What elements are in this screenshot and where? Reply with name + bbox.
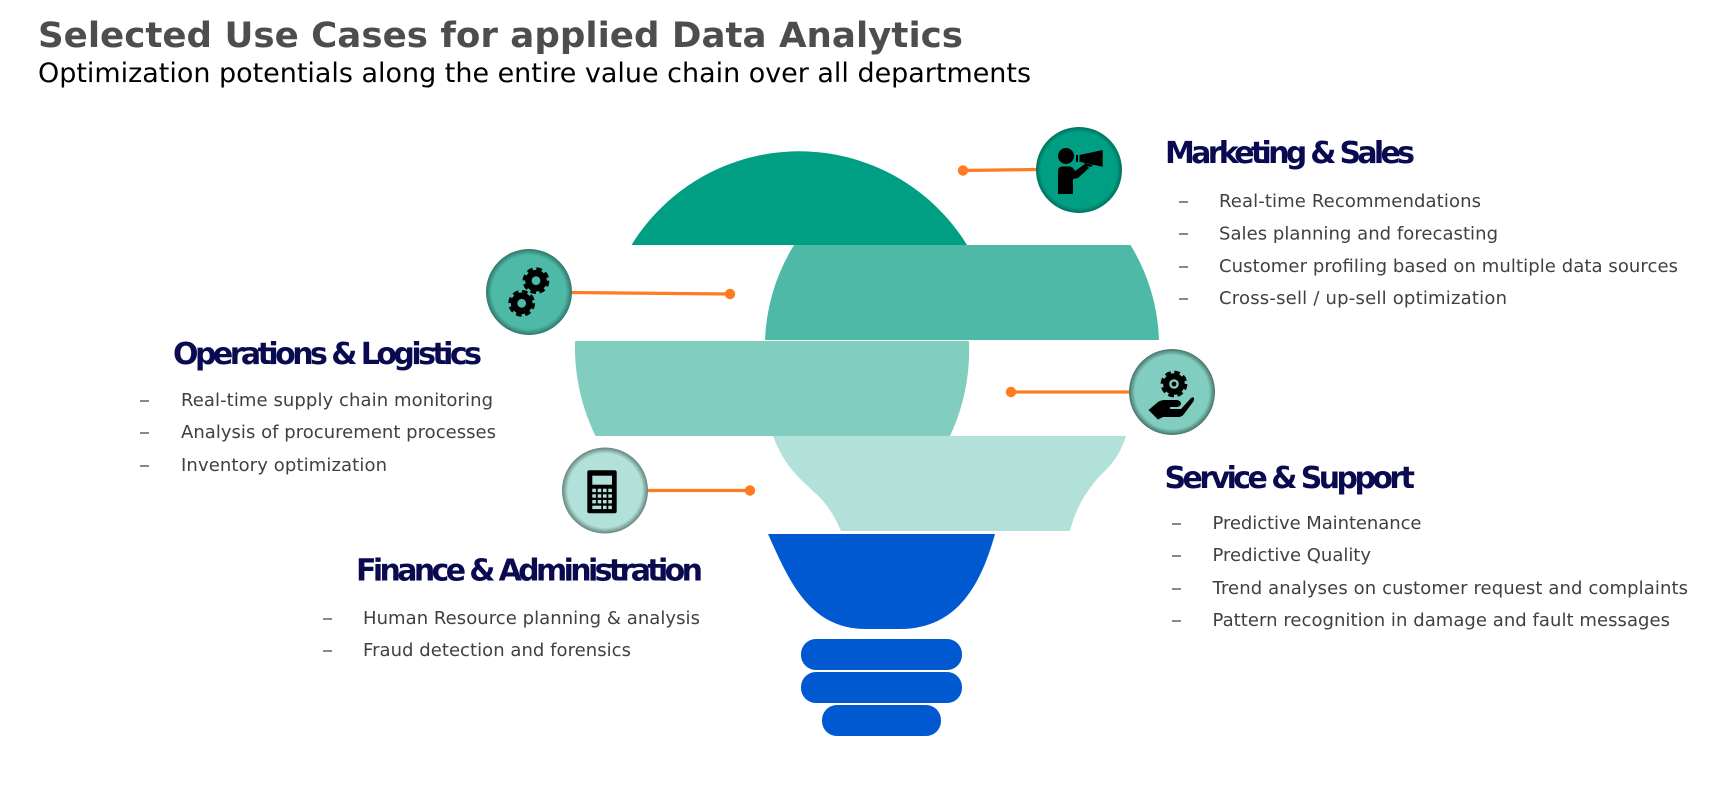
title: Selected Use Cases for applied Data Analytics	[38, 16, 963, 56]
list: service use cases: Predictive Quality	[1212, 545, 1371, 566]
bulb screw thread 3	[822, 705, 941, 736]
bulb slice: logistics band	[575, 341, 969, 436]
heading: operations and logistics: Operations & Logistics	[173, 337, 482, 372]
connector: finance	[647, 485, 755, 496]
bulb screw thread 1	[801, 639, 962, 670]
icon: operations gears	[486, 249, 572, 335]
list: finance use cases: Human Resource planning & analysis	[363, 608, 700, 629]
icon: service hand with gear	[1129, 349, 1215, 435]
list: marketing use cases: Sales planning and forecasting	[1219, 224, 1498, 244]
list: finance use cases	[323, 608, 700, 661]
panel: service and support	[1164, 461, 1688, 631]
subtitle: Optimization potentials along the entire value chain over all departments	[38, 58, 1031, 89]
connector: operations	[571, 289, 735, 299]
icon: finance calculator	[562, 448, 648, 534]
list: operations use cases: Analysis of procurement processes	[181, 422, 496, 443]
list: marketing use cases: Customer profiling based on multiple data sources	[1219, 256, 1678, 277]
panel: finance and administration	[323, 554, 703, 661]
list: service use cases	[1172, 513, 1688, 631]
heading: finance and administration: Finance & Administration	[356, 554, 703, 588]
panel: marketing and sales	[1165, 136, 1678, 309]
bulb slice: service neck	[773, 436, 1126, 531]
list: operations use cases: Inventory optimization	[181, 455, 387, 476]
list: service use cases: Trend analyses on customer request and complaints	[1212, 578, 1688, 599]
list: marketing use cases: Real-time Recommendations	[1219, 191, 1481, 212]
bulb slice: marketing dome	[632, 151, 967, 245]
heading: marketing and sales: Marketing & Sales	[1165, 136, 1415, 171]
heading: service and support: Service & Support	[1164, 461, 1415, 496]
icon: marketing megaphone person	[1036, 127, 1122, 213]
list: service use cases: Pattern recognition in damage and fault messages	[1212, 610, 1670, 631]
list: operations use cases: Real-time supply chain monitoring	[181, 390, 493, 411]
list: marketing use cases	[1179, 191, 1678, 309]
bulb screw thread 2	[801, 672, 962, 703]
list: operations use cases	[140, 390, 496, 476]
list: marketing use cases: Cross-sell / up-sell optimization	[1219, 288, 1507, 309]
bulb slice: operations band	[765, 245, 1159, 340]
connector: service	[1006, 387, 1131, 397]
panel: operations and logistics	[140, 337, 496, 476]
list: finance use cases: Fraud detection and forensics	[363, 640, 631, 661]
list: service use cases: Predictive Maintenance	[1212, 513, 1422, 534]
bulb slice: blue base	[768, 534, 995, 629]
light bulb graphic	[575, 151, 1159, 736]
connector: marketing	[958, 165, 1038, 176]
